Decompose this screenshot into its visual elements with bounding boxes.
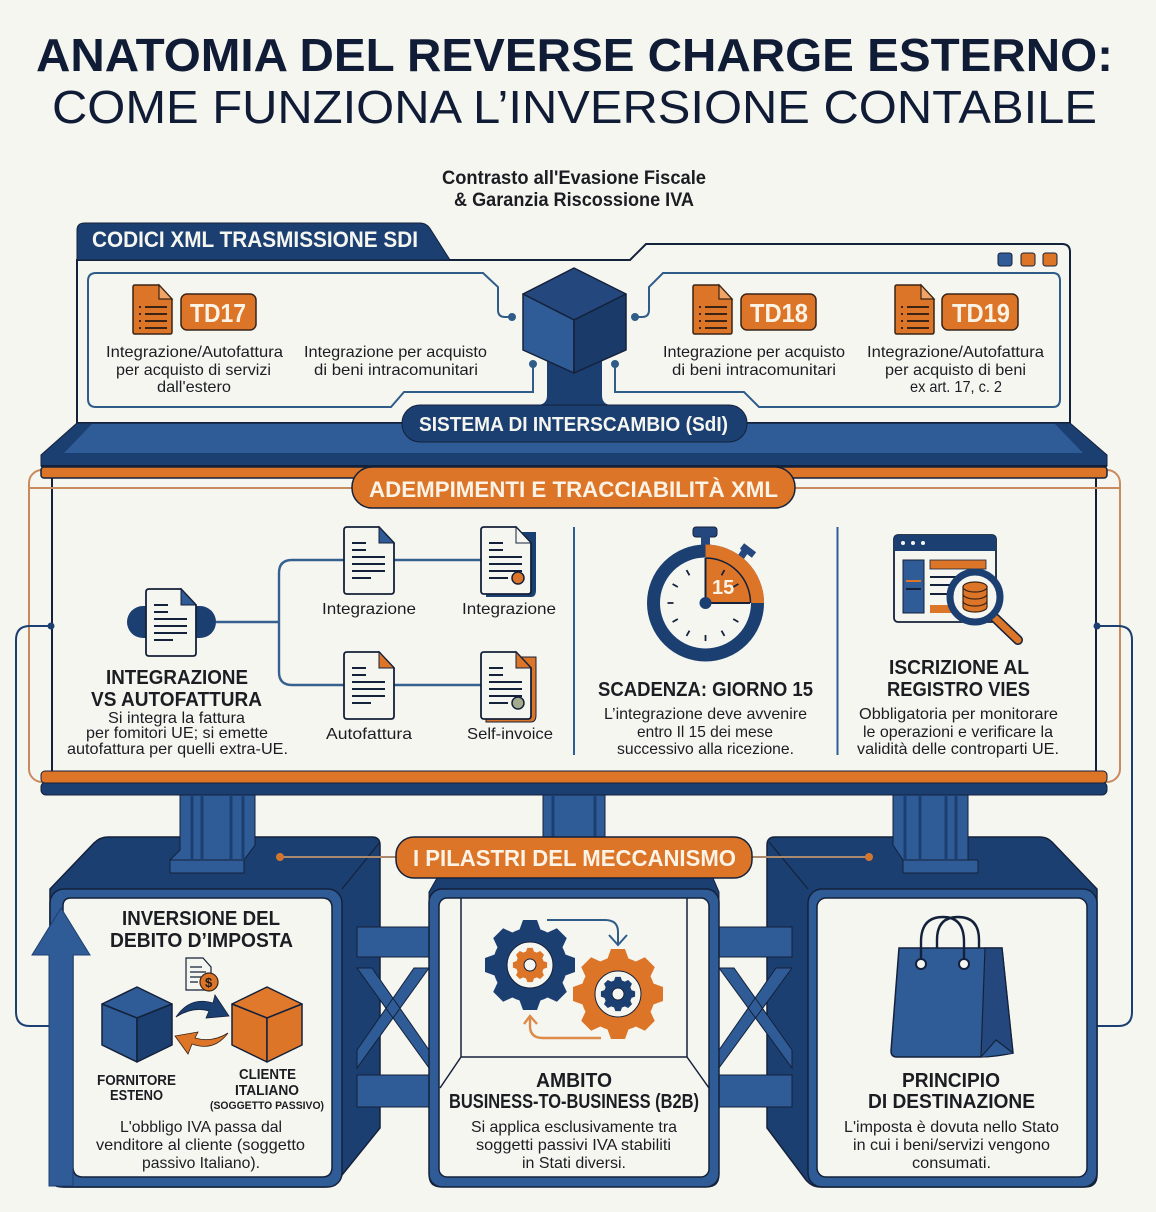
text: L'imposta è dovuta nello Stato [844,1119,1059,1136]
heading: registro VIES [887,657,1030,701]
heading: scadenza: SCADENZA: GIORNO 15 [598,679,813,701]
hub label: SISTEMA DI INTERSCAMBIO (SdI) [419,414,728,436]
left circuit frame [88,273,536,407]
TD18: Integrazione per acquisto [663,344,845,361]
heading: INVERSIONE DEL [122,908,280,930]
TD18: TD18 [750,298,808,328]
TD19 [867,285,1044,396]
text: registro VIES: validità delle controparti UE. [857,741,1059,758]
TD17 [106,285,283,396]
label: cliente italiano [210,1067,324,1112]
pillar: inversione del debito [32,837,380,1187]
arrow: orange [524,1016,601,1038]
text: integrazione vs autofattura: autofattura per quelli extra-UE. [67,741,288,758]
title: COME FUNZIONA L’INVERSIONE CONTABILE [52,81,1097,133]
pillar body [429,878,719,1187]
pillar: ambito B2B [429,878,719,1187]
heading: registro VIES: ISCRIZIONE AL [889,657,1029,679]
icon: stacked document self-invoice: Self-invoice [467,726,553,743]
text: integrazione vs autofattura: per fomitori UE; si emette [86,725,268,742]
title: ANATOMIA DEL REVERSE CHARGE ESTERNO: [36,29,1113,81]
frame: orange outline [29,470,1120,782]
arrow: blue [547,920,627,945]
icon: stopwatch [654,527,764,655]
subtitle: & Garanzia Riscossione IVA [454,190,694,211]
text: scadenza: entro Il 15 dei mese [637,724,773,741]
label: fornitore estero: ESTENO [110,1088,163,1104]
hub cube [523,268,626,373]
TD17: Integrazione/Autofattura [106,344,283,361]
text: in cui i beni/servizi vengono [853,1137,1050,1154]
arrow up [32,908,90,1186]
heading: AMBITO [536,1070,612,1092]
TD17 second description [304,344,487,379]
left connector [16,626,51,1026]
TD19: ex art. 17, c. 2 [910,379,1002,396]
icon: tax document: $ [205,975,213,990]
heading: integrazione vs autofattura: INTEGRAZIONE [106,667,248,689]
TD18 [663,285,845,379]
right circuit frame [612,273,1060,407]
TD19: TD19 [952,298,1010,328]
icon: cloud document [127,589,216,656]
TD17 second description: Integrazione per acquisto [304,344,487,361]
panel tab [77,223,450,260]
label: fornitore estero [97,1073,176,1104]
heading: integrazione vs autofattura [91,667,262,711]
text: venditore al cliente (soggetto [96,1137,305,1154]
heading [449,1070,699,1113]
icon: orange gear [573,949,663,1039]
icon: swap arrows [175,995,229,1054]
title [36,29,1113,133]
icon: stopwatch: 15 [712,577,734,599]
text [96,1119,305,1172]
label: fornitore estero: FORNITORE [97,1073,176,1089]
icon: document autofattura [326,652,412,743]
icon: VIES register search [894,535,1018,640]
connector dots [48,622,1100,630]
panel: codici XML [77,223,1070,423]
section pill: ADEMPIMENTI E TRACCIABILITÀ XML [369,477,778,502]
shelf: bottom platform [41,771,1107,795]
flow lines [216,560,481,685]
heading: DEBITO D’IMPOSTA [110,930,293,952]
SdI hub [402,268,747,442]
label: cliente italiano: CLIENTE [239,1067,296,1083]
icon: navy gear [485,920,575,1010]
orange top band [41,467,1107,478]
pillar inner card [817,898,1087,1177]
icon: document integrazione: Integrazione [322,601,416,618]
text: scadenza: L’integrazione deve avvenire [604,706,807,723]
TD17: TD17 [190,298,246,328]
TD17 second description: di beni intracomunitari [314,362,478,379]
icon: document autofattura: Autofattura [326,726,412,743]
icon: blue cube [102,987,172,1062]
heading: DI DESTINAZIONE [868,1091,1035,1113]
icon: shopping bag [891,917,1013,1057]
heading [868,1070,1035,1113]
heading: registro VIES: REGISTRO VIES [887,679,1030,701]
text: L'obbligo IVA passa dal [120,1119,282,1136]
TD19: per acquisto di beni [885,362,1026,379]
cross braces left [357,927,429,1107]
label: cliente italiano: (SOGGETTO PASSIVO) [210,1100,324,1112]
icon: tax document [186,958,218,991]
text: passivo Italiano). [142,1155,260,1172]
panel tab: CODICI XML TRASMISSIONE SDI [92,227,418,252]
pillar body [767,837,1097,1187]
pillar: principio di destinazione [767,837,1097,1187]
icon: orange cube [232,987,302,1062]
text: scadenza [604,706,807,758]
icon: stacked document self-invoice [467,652,553,743]
label: cliente italiano: ITALIANO [235,1083,299,1099]
TD18: di beni intracomunitari [672,362,836,379]
TD19: Integrazione/Autofattura [867,344,1044,361]
text: registro VIES [857,706,1059,758]
text: consumati. [912,1155,991,1172]
text: soggetti passivi IVA stabiliti [476,1137,671,1154]
text: integrazione vs autofattura [67,710,288,758]
text: in Stati diversi. [522,1155,626,1172]
cross braces right [719,927,792,1107]
heading [110,908,293,952]
text [471,1119,677,1172]
icon: stacked document integrazione [462,527,556,618]
text [844,1119,1059,1172]
text: registro VIES: le operazioni e verificare la [863,724,1053,741]
subtitle [442,168,706,211]
window buttons [998,253,1057,266]
icon: document integrazione [322,527,416,618]
section pill: pilastri: I PILASTRI DEL MECCANISMO [413,845,736,871]
pillar inner card [439,898,709,1177]
panel: adempimenti [29,467,1120,772]
subtitle: Contrasto all'Evasione Fiscale [442,168,706,189]
shelf: top platform [41,423,1107,466]
pill connector lines [276,853,873,861]
TD17: per acquisto di servizi [116,362,271,379]
TD17: dall'estero [157,379,231,396]
text: registro VIES: Obbligatoria per monitorare [859,706,1058,723]
hub stem [510,345,640,425]
pillar inner card [63,898,332,1177]
pillar body [50,837,380,1187]
section pill: pilastri [396,837,752,878]
icon: stacked document integrazione: Integrazione [462,601,556,618]
text: Si applica esclusivamente tra [471,1119,677,1136]
column stubs [170,795,978,873]
section pill [352,467,795,508]
heading: PRINCIPIO [902,1070,1000,1092]
text: scadenza: successivo alla ricezione. [617,741,794,758]
text: integrazione vs autofattura: Si integra la fattura [108,710,245,727]
right connector [1097,626,1132,1026]
heading: integrazione vs autofattura: VS AUTOFATTURA [91,689,262,711]
hub label [402,405,747,442]
heading: BUSINESS-TO-BUSINESS (B2B) [449,1091,699,1113]
